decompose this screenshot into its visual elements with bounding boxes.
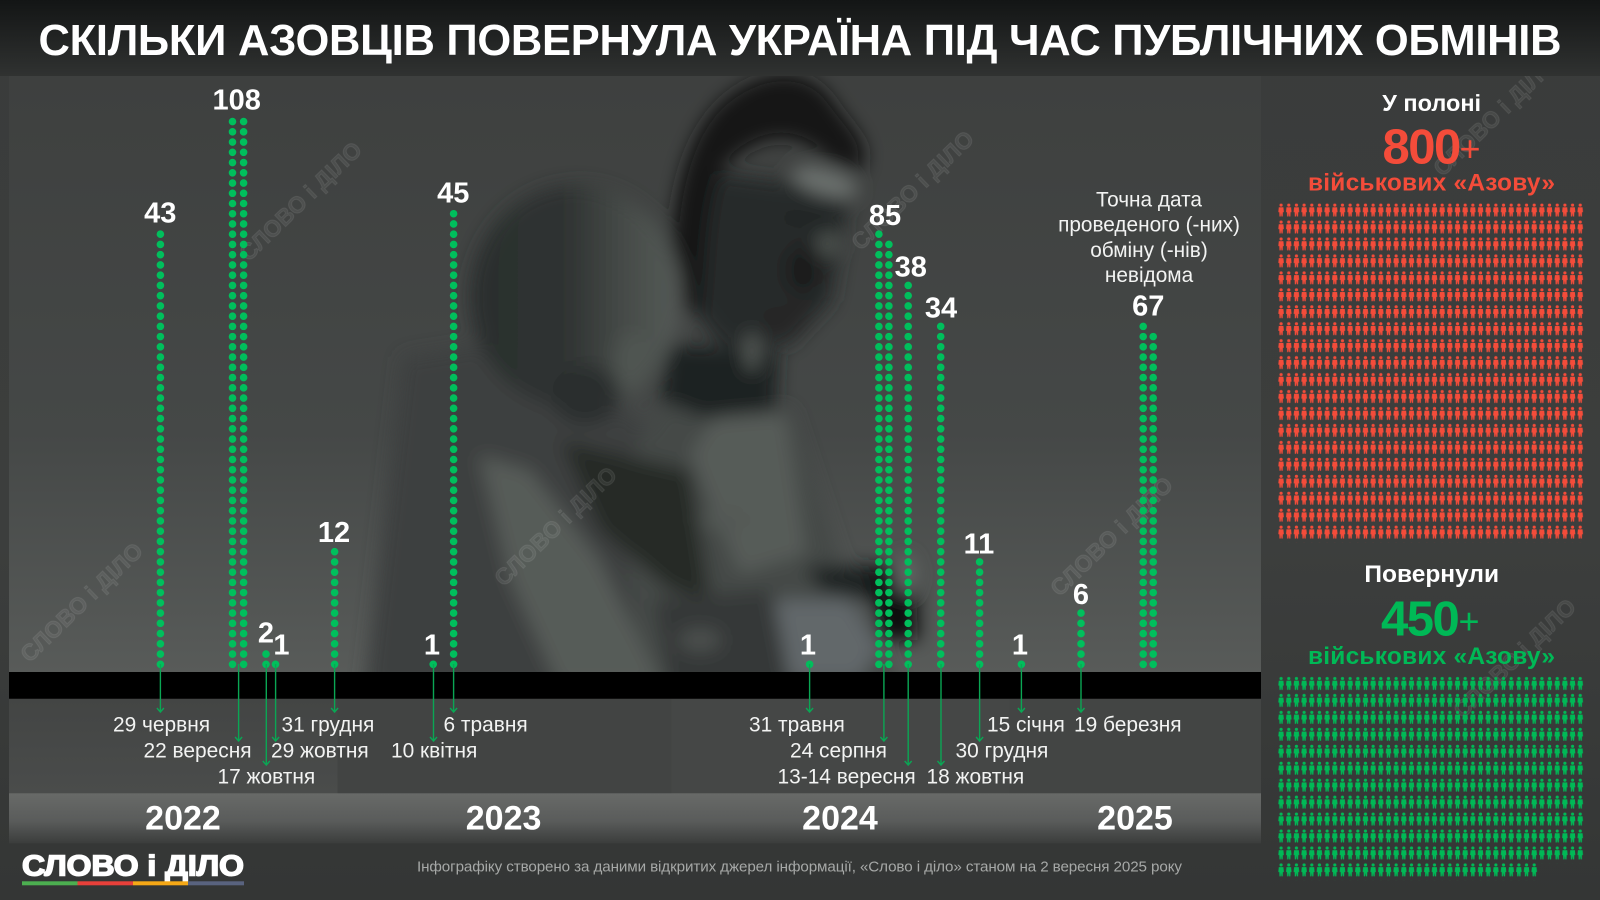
exchange: 15 січня 2025, 1 — [987, 630, 1065, 737]
logo: Слово і діло: СЛОВО і ДІЛО — [22, 851, 244, 883]
heading: У полоні: У полоні — [1382, 90, 1481, 116]
blurred background photo: two soldiers — [365, 75, 918, 690]
exchange: 10 квітня 2023, 1: 10 квітня — [391, 740, 477, 763]
exchange: 18 жовтня 2024, 34: 18 жовтня — [926, 765, 1024, 788]
exchange: 10 квітня 2023, 1 — [391, 630, 477, 763]
watermarks: СЛОВО і ДІЛО — [1448, 593, 1581, 723]
panel: in captivity — [1277, 90, 1584, 542]
heading: Повернули: Повернули — [1364, 561, 1499, 588]
people grid: green icons — [1277, 677, 1584, 880]
year band — [9, 793, 1261, 843]
big number 800+: 800 — [1382, 120, 1460, 174]
watermarks: СЛОВО і ДІЛО — [1045, 471, 1178, 601]
title: СКІЛЬКИ АЗОВЦІВ ПОВЕРНУЛА УКРАЇНА ПІД ЧАС ПУБЛІЧНИХ ОБМІНІВ — [38, 17, 1562, 65]
exchange: 22 вересня 2022, 108 — [144, 84, 261, 763]
exchange: 29 жовтня 2022, 1 — [271, 630, 369, 763]
source note: Інфографіку створено за даними відкритих джерел інформації, «Слово і діло» станом на 2 вересня 2025 року — [417, 859, 1182, 876]
big number 450+: 450 — [1381, 593, 1459, 647]
exchange: 30 грудня 2024, 11 — [956, 528, 1048, 763]
exchange: 31 травня 2024, 1: 1 — [800, 630, 816, 662]
watermarks: СЛОВО і ДІЛО — [846, 125, 979, 255]
exchange: 31 грудня 2022, 12: 31 грудня — [282, 714, 374, 737]
exchange: 31 травня 2024, 1 — [749, 630, 845, 737]
exchange: 30 грудня 2024, 11: 11 — [964, 528, 994, 560]
exchange: 29 жовтня 2022, 1: 1 — [273, 630, 290, 662]
exchange: 29 червня 2022, 43: 29 червня — [113, 714, 210, 737]
exchange: 29 червня 2022, 43: 43 — [144, 198, 176, 230]
exchange: 18 жовтня 2024, 34 — [925, 293, 1024, 788]
exchange: 17 жовтня 2022, 2: 2 — [258, 618, 274, 650]
exchange: 31 грудня 2022, 12 — [282, 517, 374, 737]
exchange: 13-14 вересня 2024, 38: 38 — [895, 252, 927, 284]
watermarks: СЛОВО і ДІЛО — [489, 461, 622, 591]
exchange: 22 вересня 2022, 108: 108 — [213, 84, 261, 116]
exchange: 31 грудня 2022, 12: 12 — [318, 517, 350, 549]
watermarks — [15, 51, 1581, 723]
exchange: 17 жовтня 2022, 2: 17 жовтня — [218, 765, 315, 788]
exchange: 6 травня 2023, 45 — [437, 177, 528, 737]
exchange: 24 серпня 2024, 85 — [790, 200, 901, 763]
note: exact date unknown: Точна дата — [1096, 189, 1202, 212]
exchange: 6 травня 2023, 45: 45 — [437, 177, 469, 209]
year label 2024: 2024 — [802, 799, 878, 837]
note: exact date unknown: проведеного (-них) — [1058, 214, 1240, 237]
subtitle: військових «Азову» — [1308, 170, 1555, 197]
exchange: 18 жовтня 2024, 34: 34 — [925, 293, 957, 325]
exchange: 30 грудня 2024, 11: 30 грудня — [956, 740, 1048, 763]
exchange: 24 серпня 2024, 85: 85 — [869, 200, 901, 232]
watermarks: СЛОВО і ДІЛО — [1428, 51, 1561, 181]
exchange: 15 січня 2025, 1: 15 січня — [987, 714, 1065, 737]
big number 800+: + — [1460, 128, 1481, 169]
year label 2022: 2022 — [145, 799, 221, 837]
year label 2023: 2023 — [466, 799, 541, 837]
exchange: 29 червня 2022, 43 — [113, 198, 210, 737]
exchange: 31 травня 2024, 1: 31 травня — [749, 714, 845, 737]
exchange: 13-14 вересня 2024, 38 — [778, 252, 927, 788]
subtitle: військових «Азову» — [1308, 643, 1555, 670]
exchange: 6 травня 2023, 45: 6 травня — [444, 714, 528, 737]
timeline black band — [9, 672, 1261, 699]
exchange: 22 вересня 2022, 108: 22 вересня — [144, 740, 252, 763]
exchange: 29 жовтня 2022, 1: 29 жовтня — [271, 740, 369, 763]
big number 450+: + — [1458, 600, 1480, 642]
exchange: 15 січня 2025, 1: 1 — [1012, 630, 1028, 662]
exchange: 10 квітня 2023, 1: 1 — [424, 630, 440, 662]
exchange: 17 жовтня 2022, 2 — [218, 618, 315, 788]
note: exact date unknown: обміну (-нів) — [1090, 239, 1208, 262]
exchange: 19 березня 2025, 6: 6 — [1073, 579, 1089, 611]
people grid: 800 red icons — [1277, 203, 1584, 542]
watermarks: СЛОВО і ДІЛО — [234, 136, 367, 266]
header bar — [0, 0, 1600, 76]
exchange: 13-14 вересня 2024, 38: 13-14 вересня — [778, 765, 916, 788]
year label 2025: 2025 — [1097, 799, 1173, 837]
exchange: unknown date 2025, 67: 67 — [1132, 291, 1164, 323]
note: exact date unknown — [1058, 189, 1240, 287]
exchange: 19 березня 2025, 6 — [1073, 579, 1182, 737]
chart background panel — [9, 76, 1261, 672]
exchange: 24 серпня 2024, 85: 24 серпня — [790, 740, 887, 763]
area under the black band: year sections — [9, 699, 1261, 794]
panel: returned — [1277, 561, 1584, 880]
note: exact date unknown: невідома — [1105, 264, 1194, 287]
exchange: 19 березня 2025, 6: 19 березня — [1074, 714, 1182, 737]
watermarks: СЛОВО і ДІЛО — [15, 537, 148, 667]
